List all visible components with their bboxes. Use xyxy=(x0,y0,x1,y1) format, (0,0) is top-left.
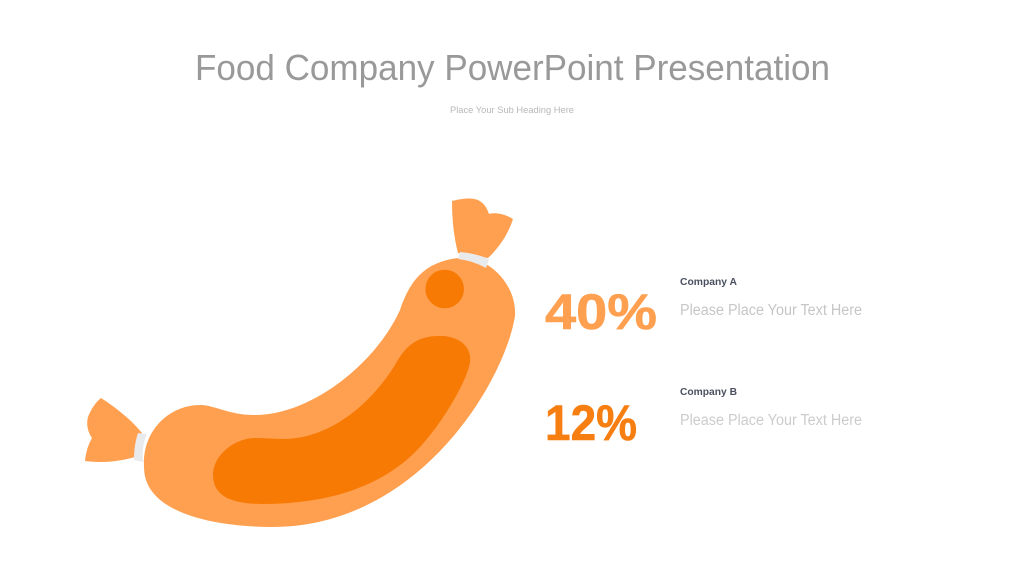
left band xyxy=(134,433,147,462)
label: Company A: Company A xyxy=(680,276,737,288)
subtitle: Place Your Sub Heading Here xyxy=(450,105,574,115)
label: Company B: Company B xyxy=(680,386,737,398)
icon: top casing tie xyxy=(452,198,513,258)
text: Company B description: Please Place Your Text Here xyxy=(680,412,862,429)
icon: left casing tie xyxy=(85,398,142,462)
stat: 40%: 40% xyxy=(545,284,657,340)
stat: 12%: 12% xyxy=(545,395,637,451)
sausage body xyxy=(144,258,515,527)
highlight circle xyxy=(425,270,464,308)
top band xyxy=(458,252,489,268)
illustration: sausage xyxy=(85,198,515,527)
inner dark area xyxy=(213,336,470,504)
text: Company A description: Please Place Your Text Here xyxy=(680,302,862,319)
title: Food Company PowerPoint Presentation xyxy=(195,47,830,88)
